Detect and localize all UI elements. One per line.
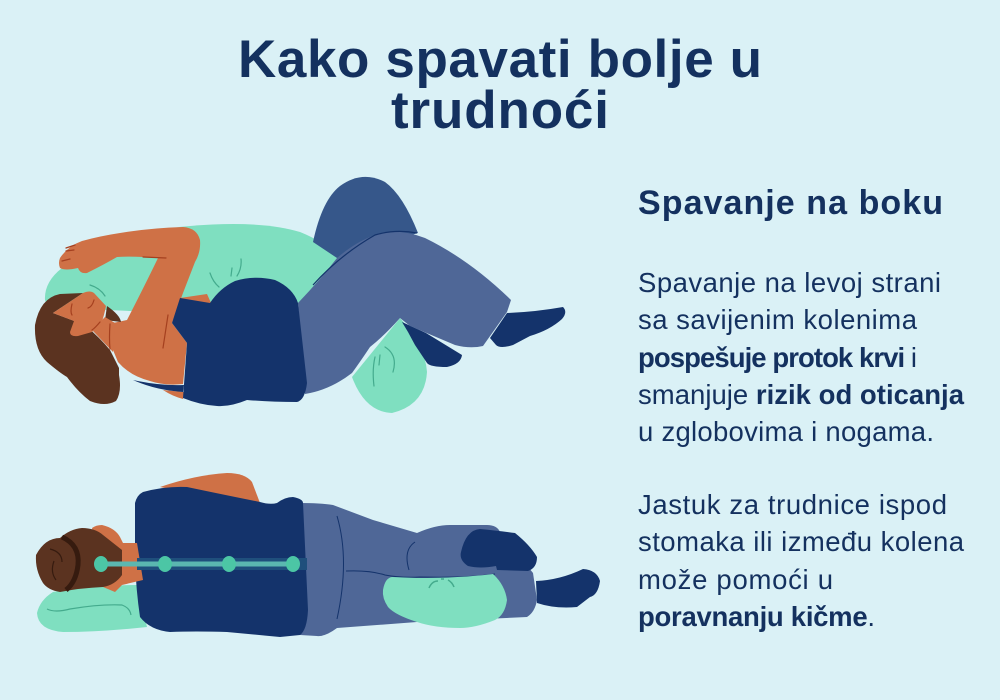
arm behind	[160, 473, 260, 503]
front leg	[298, 232, 511, 394]
title	[238, 30, 762, 140]
far foot	[490, 307, 565, 347]
bottom foot	[536, 569, 600, 608]
section heading: Spavanje na boku	[638, 184, 943, 222]
illustration: side sleeping with bent knees	[35, 177, 565, 413]
lower foot	[402, 322, 462, 367]
body pillow	[45, 224, 427, 413]
paragraph: blood flow: Spavanje na levoj strani	[638, 267, 941, 298]
facial and body lines	[62, 245, 168, 349]
paragraph: pregnancy pillow: stomaka ili između kolena	[638, 526, 965, 557]
hair	[35, 293, 120, 404]
strap	[133, 380, 184, 392]
pants crease lines	[337, 516, 495, 619]
paragraph: blood flow: pospešuje protok krvi i	[638, 342, 917, 373]
paragraph: pregnancy pillow: može pomoći u	[638, 564, 833, 595]
paragraph: pregnancy pillow: Jastuk za trudnice ispod	[638, 489, 947, 520]
paragraph: blood flow: smanjuje rizik od oticanja	[638, 379, 965, 410]
spine alignment markers	[94, 556, 307, 572]
head pillow	[37, 585, 147, 632]
torso	[172, 278, 307, 406]
leg crease	[313, 231, 417, 285]
top foot	[461, 529, 537, 571]
neck and shoulder	[92, 525, 143, 592]
torso	[135, 487, 308, 637]
face	[53, 292, 106, 336]
title: Kako spavati bolje u	[238, 30, 762, 89]
hair	[36, 528, 122, 592]
paragraph: blood flow: sa savijenim kolenima	[638, 304, 918, 335]
paragraph: blood flow	[638, 267, 965, 447]
pillow creases	[90, 259, 394, 386]
paragraph: blood flow: u zglobovima i nogama.	[638, 416, 934, 447]
title: trudnoći	[391, 81, 609, 140]
neck	[92, 317, 115, 352]
pants	[300, 503, 537, 636]
paragraph: pregnancy pillow: poravnanju kičme.	[638, 601, 875, 632]
upper arm and shoulder	[59, 227, 200, 385]
back leg	[313, 177, 418, 258]
text panel	[638, 184, 965, 632]
illustration: side sleeping with aligned spine	[36, 473, 600, 637]
paragraph: pregnancy pillow	[638, 489, 965, 632]
hair swirl	[50, 537, 78, 590]
small skin patches	[163, 294, 211, 399]
bun detail	[105, 306, 121, 322]
knee pillow	[383, 574, 507, 628]
